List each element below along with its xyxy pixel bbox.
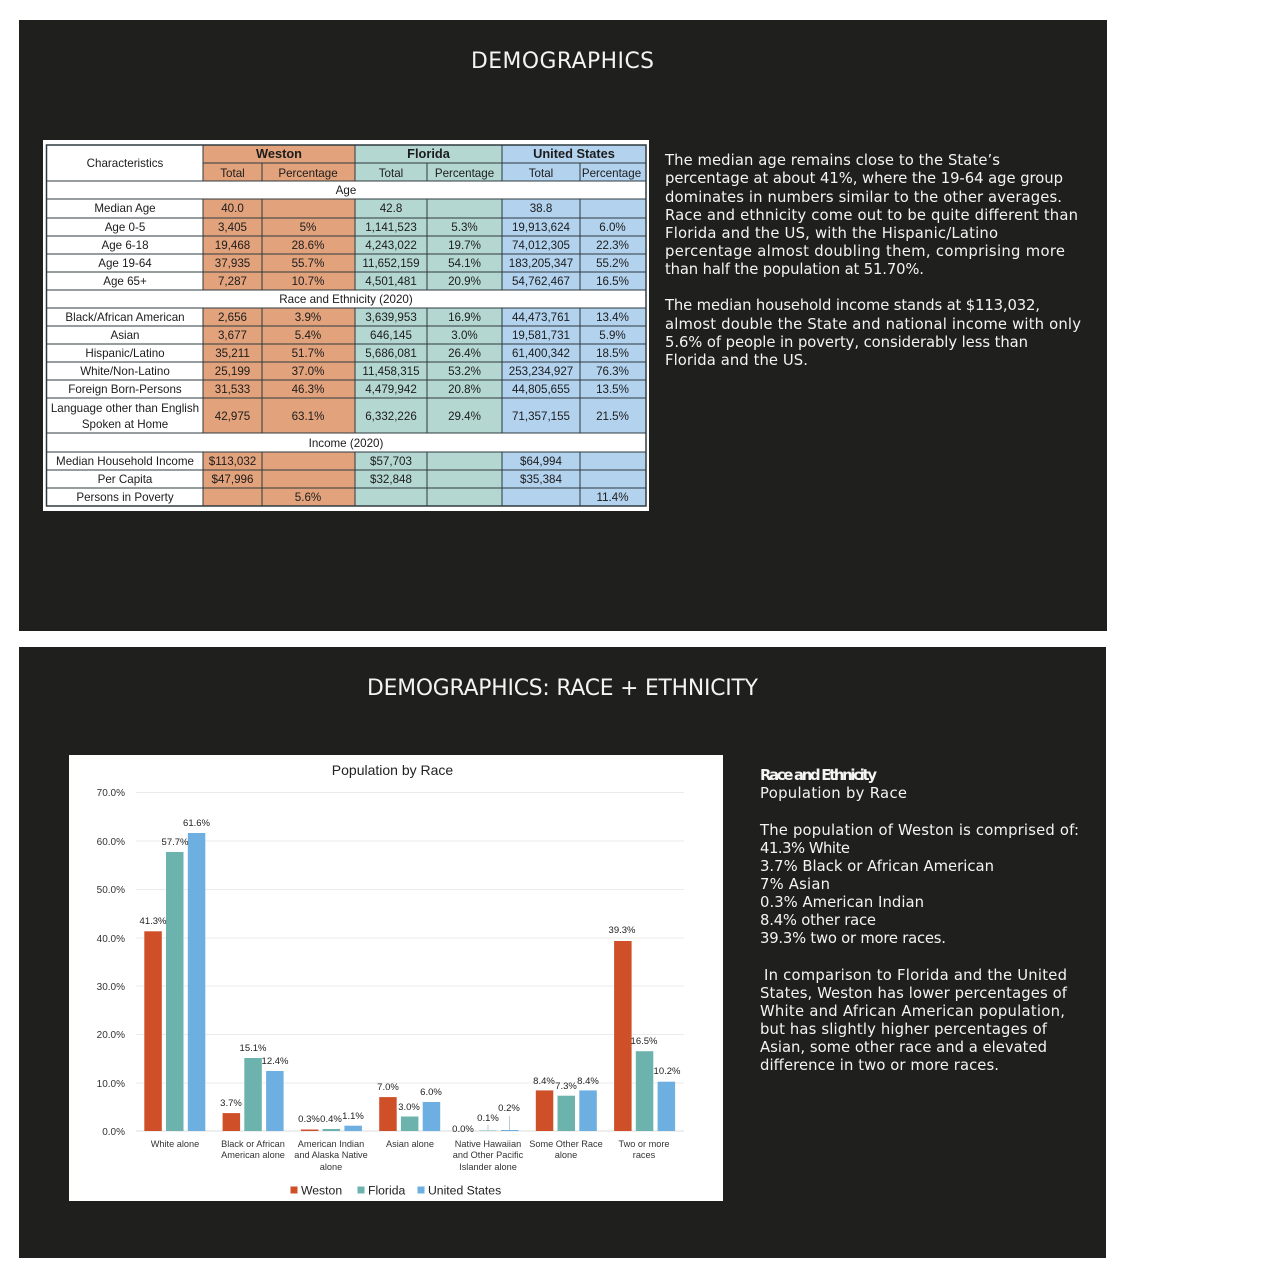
demographics table: 3,677 [218,329,247,342]
demographics table: 253,234,927 [509,365,573,378]
value labels: 3.7% [220,1098,242,1109]
value labels: 16.5% [631,1036,658,1047]
category labels: American alone [221,1150,285,1160]
text block: demographics summary: Race and ethnicity come out to be quite different than [665,207,1078,224]
demographics table: Percentage [278,167,338,180]
text block: race and ethnicity summary: 0.3% American Indian [760,894,924,911]
demographics table: $32,848 [370,473,412,486]
value labels: 12.4% [262,1056,289,1067]
demographics table: 22.3% [596,239,629,252]
value labels: 3.0% [398,1102,420,1113]
text block: demographics summary: Florida and the US. [665,352,808,369]
demographics table: Hispanic/Latino [85,347,165,360]
category labels: Black or African [221,1139,285,1149]
demographics table: Florida [407,146,451,161]
demographics table: 20.8% [448,383,481,396]
bars: United States [188,833,675,1131]
category labels: races [633,1150,656,1160]
text block: race and ethnicity summary: The population of Weston is comprised of: [759,822,1079,839]
demographics table: 20.9% [448,275,481,288]
demographics table: $57,703 [370,455,412,468]
text block: demographics summary: dominates in numbers similar to the other averages. [665,189,1062,206]
y axis labels: 50.0% [97,885,125,896]
category labels [151,1139,670,1172]
demographics table: 51.7% [292,347,324,360]
demographics table: 74,012,305 [512,239,570,252]
demographics table: Age 6-18 [101,239,149,252]
value labels: 0.2% [498,1103,520,1114]
demographics table: 5.3% [451,221,478,234]
legend: United States [428,1184,501,1198]
demographics table: 7,287 [218,275,247,288]
demographics table: 37,935 [215,257,250,270]
y axis labels: 0.0% [102,1127,125,1138]
demographics table: 53.2% [448,365,481,378]
category labels: American Indian [298,1139,364,1149]
demographics table: 2,656 [218,311,247,324]
demographics table: 55.7% [292,257,324,270]
demographics table: 42,975 [215,410,250,423]
value labels: 41.3% [140,916,167,927]
demographics table: 25,199 [215,365,250,378]
demographics table: Spoken at Home [82,418,168,431]
value labels: 8.4% [577,1076,599,1087]
category labels: Two or more [618,1139,670,1149]
demographics table: White/Non-Latino [80,365,170,378]
y axis labels: 20.0% [97,1030,125,1041]
demographics table: 71,357,155 [512,410,570,423]
category labels: and Alaska Native [294,1150,368,1160]
text block: race and ethnicity summary: Race and Ethnicity [760,767,877,784]
demographics table: 3.0% [451,329,478,342]
demographics table: Age 65+ [103,275,147,288]
demographics table: 19.7% [448,239,481,252]
demographics table: Persons in Poverty [76,491,174,504]
text block: race and ethnicity summary: White and African American population, [760,1003,1065,1020]
demographics table: Total [529,167,553,180]
text block: demographics summary [664,152,1081,369]
demographics table: Total [220,167,245,180]
text block: race and ethnicity summary: difference in two or more races. [760,1057,999,1074]
demographics table: Income (2020) [309,437,384,450]
demographics table: 42.8 [380,202,402,215]
text block: race and ethnicity summary: 39.3% two or more races. [760,930,946,947]
demographics table: 11,652,159 [362,257,420,270]
demographics table: $64,994 [520,455,562,468]
panel: demographics [19,20,1107,631]
text block: race and ethnicity summary: In comparison to Florida and the United [764,967,1067,984]
text block: demographics summary: The median age remains close to the State’s [664,152,1000,169]
category labels: White alone [151,1139,199,1149]
demographics table: 4,501,481 [365,275,417,288]
demographics table: 28.6% [292,239,324,252]
demographics table: Age 0-5 [105,221,145,234]
demographics table: 26.4% [448,347,481,360]
category labels: and Other Pacific [453,1150,524,1160]
demographics table: 5.6% [295,491,321,504]
y axis labels: 10.0% [97,1079,125,1090]
bars: Weston [144,931,632,1131]
chart title: Population by Race [332,762,453,778]
demographics table: 13.5% [596,383,629,396]
demographics table: 5.9% [599,329,626,342]
demographics table: $113,032 [209,455,256,468]
value labels: 0.1% [477,1113,499,1124]
category labels: Native Hawaiian [455,1139,521,1149]
demographics table: 4,479,942 [365,383,417,396]
text block: demographics summary: almost double the State and national income with only [665,316,1081,333]
text block: demographics summary: 5.6% of people in poverty, considerably less than [665,334,1028,351]
demographics table: 37.0% [292,365,324,378]
demographics table: Asian [110,329,140,342]
demographics table: 6.0% [599,221,626,234]
value labels: 7.3% [555,1081,577,1092]
text block: race and ethnicity summary: 7% Asian [760,876,830,893]
y axis labels: 70.0% [97,788,125,799]
legend: Florida [368,1184,405,1198]
text block: race and ethnicity summary: 41.3% White [760,840,850,857]
value labels: 39.3% [609,925,636,936]
demographics table: 646,145 [370,329,412,342]
demographics table: 40.0 [221,202,244,215]
y axis labels: 30.0% [97,982,125,993]
demographics table: United States [533,146,615,161]
demographics table: 3,405 [218,221,247,234]
demographics table [43,140,649,511]
text block: demographics summary: Florida and the US, with the Hispanic/Latino [665,225,998,242]
demographics table: 10.7% [292,275,324,288]
demographics table: 3,639,953 [365,311,417,324]
demographics table: Foreign Born-Persons [68,383,182,396]
demographics table: 35,211 [215,347,250,360]
category labels: alone [320,1162,342,1172]
demographics table: 19,913,624 [512,221,571,234]
category labels: Asian alone [386,1139,434,1149]
value labels [140,818,681,1135]
value labels: 0.0% [452,1124,474,1135]
demographics table: 183,205,347 [509,257,573,270]
text block: race and ethnicity summary: 8.4% other race [760,912,876,929]
demographics table: 6,332,226 [365,410,417,423]
text block: demographics summary: percentage at about 41%, where the 19-64 age group [665,170,1063,187]
demographics table: 16.5% [596,275,629,288]
demographics table: Per Capita [98,473,153,486]
y axis labels: 40.0% [97,934,125,945]
category labels: Some Other Race [529,1139,603,1149]
text block: demographics summary: percentage almost doubling them, comprising more [665,243,1065,260]
category labels: Islander alone [459,1162,517,1172]
demographics table: 21.5% [596,410,629,423]
demographics table: 5,686,081 [365,347,417,360]
demographics table: 5.4% [295,329,321,342]
title: demographics: DEMOGRAPHICS [471,49,654,74]
value labels: 10.2% [654,1066,681,1077]
demographics table: 13.4% [596,311,629,324]
value labels: 61.6% [183,818,211,829]
demographics table: Total [379,167,403,180]
demographics table: Language other than English [51,402,199,415]
demographics table: 63.1% [292,410,324,423]
demographics table: 19,581,731 [512,329,570,342]
demographics table: 44,805,655 [512,383,570,396]
demographics table: 31,533 [215,383,250,396]
demographics table: 76.3% [596,365,629,378]
demographics table: Percentage [582,167,641,180]
value labels: 8.4% [533,1076,555,1087]
demographics table: 11.4% [596,491,629,504]
demographics table: $47,996 [212,473,253,486]
demographics table: 18.5% [596,347,629,360]
demographics table: Percentage [435,167,494,180]
demographics table: Race and Ethnicity (2020) [279,293,413,306]
text block: race and ethnicity summary: Asian, some other race and a elevated [760,1039,1047,1056]
text block: demographics summary: The median household income stands at $113,032, [664,297,1040,314]
demographics table: 46.3% [292,383,324,396]
legend: Weston [301,1184,342,1198]
value labels: 0.4% [320,1114,342,1125]
demographics table: 44,473,761 [512,311,570,324]
demographics table: Median Household Income [56,455,194,468]
value labels: 57.7% [162,837,189,848]
demographics table: Black/African American [65,311,185,324]
demographics table: 19,468 [215,239,250,252]
text block: demographics summary: than half the population at 51.70%. [665,261,924,278]
demographics table: Weston [256,146,302,161]
demographics table: Age 19-64 [98,257,152,270]
demographics table: 61,400,342 [512,347,570,360]
text block: race and ethnicity summary: but has slightly higher percentages of [760,1021,1048,1038]
demographics table: 38.8 [530,202,552,215]
demographics table: 29.4% [448,410,481,423]
demographics table: 4,243,022 [365,239,417,252]
demographics table: $35,384 [520,473,562,486]
bar chart: population by race [69,755,723,1201]
demographics table: 54.1% [448,257,481,270]
demographics table: 11,458,315 [362,365,420,378]
demographics table: 55.2% [596,257,629,270]
text block: race and ethnicity summary [759,767,1079,1074]
text block: race and ethnicity summary: States, Weston has lower percentages of [760,985,1068,1002]
category labels: alone [555,1150,577,1160]
value labels: 6.0% [420,1087,442,1098]
text block: race and ethnicity summary: Population by Race [760,785,907,802]
value labels: 1.1% [342,1111,364,1122]
demographics table: 3.9% [295,311,321,324]
bars: Florida [166,852,653,1131]
text block: race and ethnicity summary: 3.7% Black or African American [760,858,994,875]
demographics table: 16.9% [448,311,481,324]
panel: race and ethnicity [19,647,1106,1258]
y axis labels: 60.0% [97,837,125,848]
legend [290,1184,501,1198]
demographics table: 1,141,523 [365,221,417,234]
demographics table: 5% [300,221,316,234]
demographics table: Age [336,184,356,197]
demographics table: 54,762,467 [512,275,570,288]
value labels: 7.0% [377,1082,399,1093]
demographics table: Median Age [94,202,156,215]
demographics table: Characteristics [87,157,164,170]
y axis labels [97,788,125,1138]
title: race and ethnicity: DEMOGRAPHICS: RACE + ETHNICITY [367,676,759,701]
value labels: 0.3% [298,1114,320,1125]
value labels: 15.1% [240,1043,267,1054]
